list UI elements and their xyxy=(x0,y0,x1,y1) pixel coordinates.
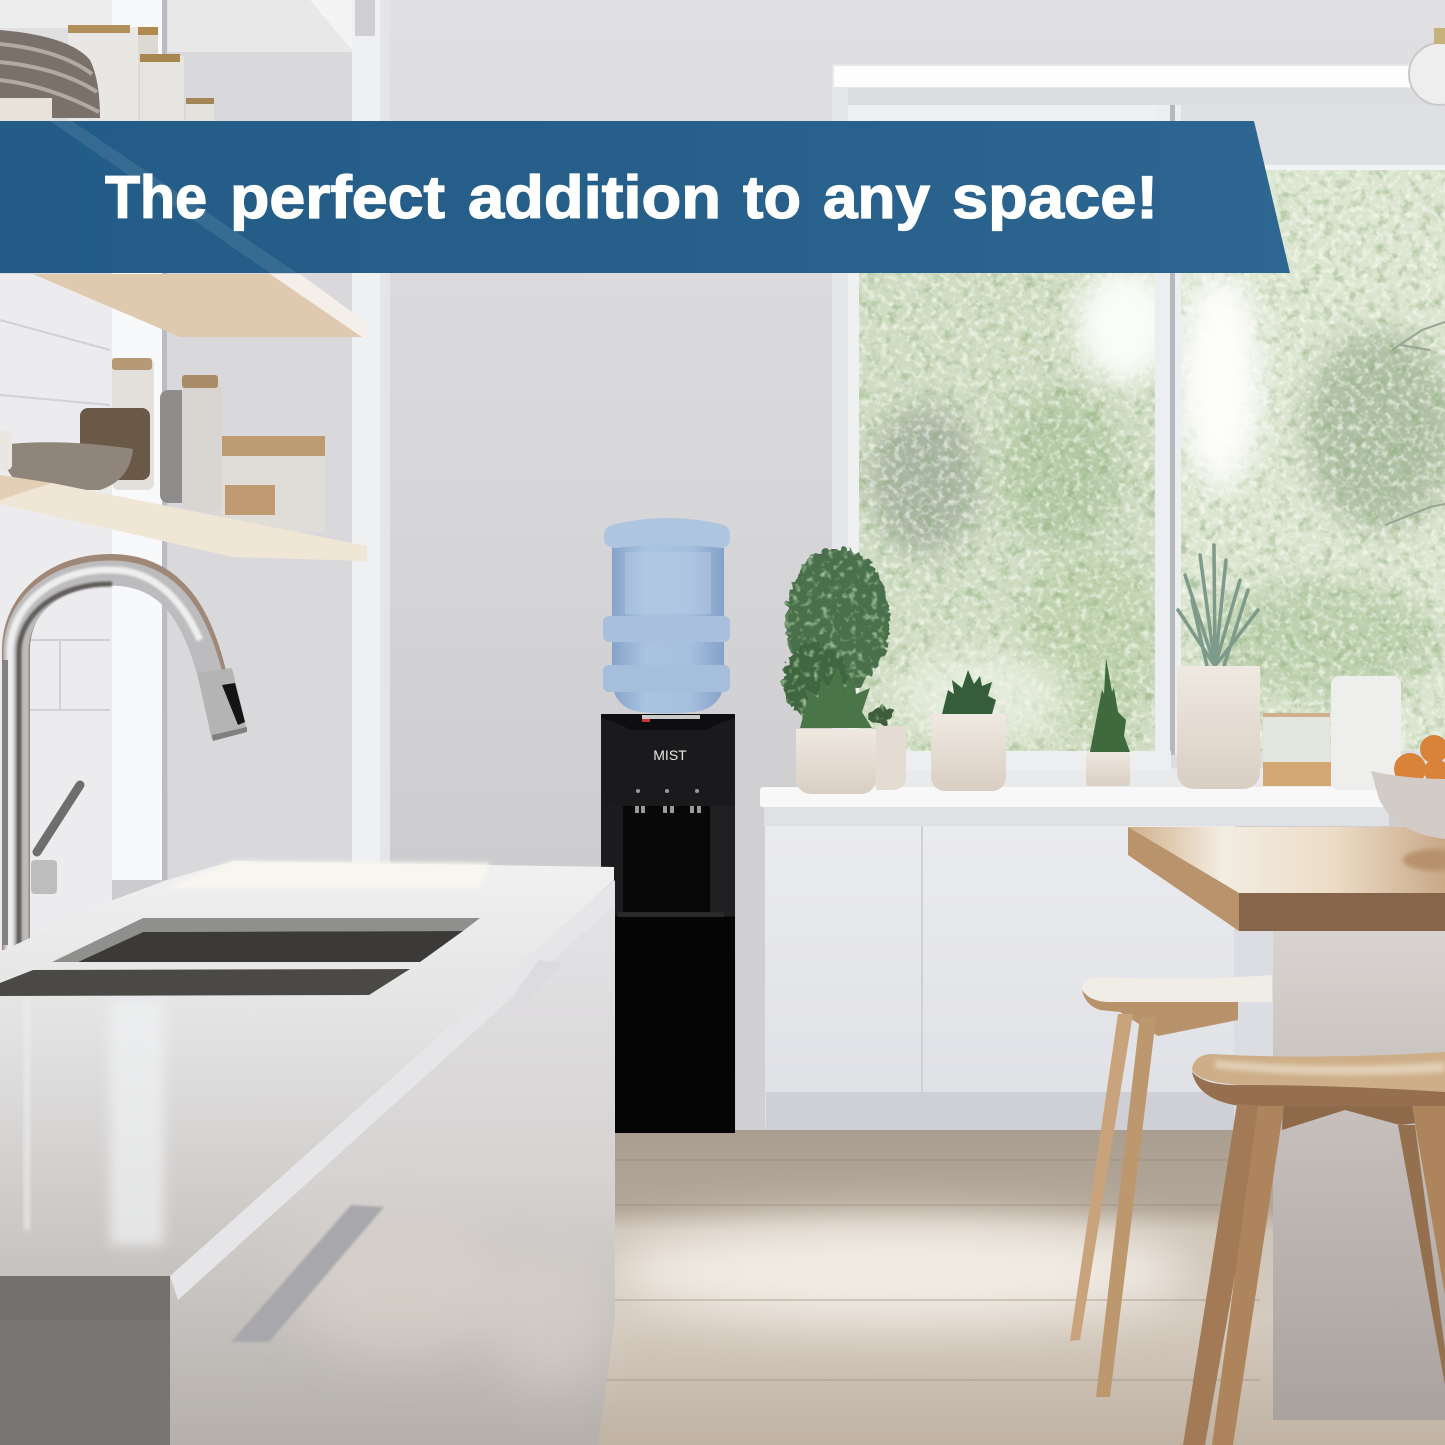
pendant lamp xyxy=(1409,28,1445,105)
stool: front xyxy=(1183,1052,1445,1445)
decor: vase and jars xyxy=(1263,676,1401,790)
plant: small spiky xyxy=(1086,658,1130,786)
kitchen faucet xyxy=(2,568,247,950)
window xyxy=(832,64,1445,790)
brand logo: MIST xyxy=(653,747,687,763)
window sill and white cabinets xyxy=(736,787,1390,1132)
banner heading xyxy=(105,164,1158,231)
fruit bowl xyxy=(1371,735,1445,839)
counter side panel xyxy=(170,880,615,1445)
jars on lower shelf xyxy=(0,358,325,532)
water cooler xyxy=(601,518,735,1133)
kitchen counter island xyxy=(0,861,615,1445)
open shelves xyxy=(0,25,367,561)
banner heading: addition xyxy=(468,164,721,231)
counter front edge xyxy=(170,880,614,1300)
floor xyxy=(598,1130,1445,1445)
banner heading: space! xyxy=(952,164,1158,231)
window glass with trees xyxy=(859,170,1445,751)
dining table xyxy=(1128,827,1445,1420)
left alcove wall xyxy=(0,0,390,954)
potted plants xyxy=(783,545,1401,794)
counter front block xyxy=(0,1276,170,1445)
top shelf canisters and plates xyxy=(0,25,214,220)
plant: succulent xyxy=(931,670,1006,791)
banner shelf reflection xyxy=(50,121,297,273)
upper shelf xyxy=(33,274,367,337)
plant pot: tall xyxy=(1177,666,1260,789)
banner heading: to xyxy=(743,164,801,231)
plant: tall shrub xyxy=(783,548,906,794)
wooden stools xyxy=(1070,975,1445,1445)
water bottle xyxy=(603,518,730,714)
banner heading: The xyxy=(105,164,207,231)
lower shelf xyxy=(0,475,367,561)
banner shape xyxy=(0,121,1290,273)
plant: tall grass xyxy=(1178,545,1258,666)
banner heading: any xyxy=(823,164,931,231)
stool: rear xyxy=(1070,975,1272,1397)
cooler body xyxy=(601,714,735,1133)
counter top surface xyxy=(0,861,614,1276)
banner heading: perfect xyxy=(230,164,445,231)
window frame xyxy=(1155,105,1181,755)
banner xyxy=(0,121,1290,273)
cabinet handles xyxy=(506,960,563,1008)
sink basins xyxy=(0,918,480,996)
dispenser buttons and taps xyxy=(635,789,701,813)
